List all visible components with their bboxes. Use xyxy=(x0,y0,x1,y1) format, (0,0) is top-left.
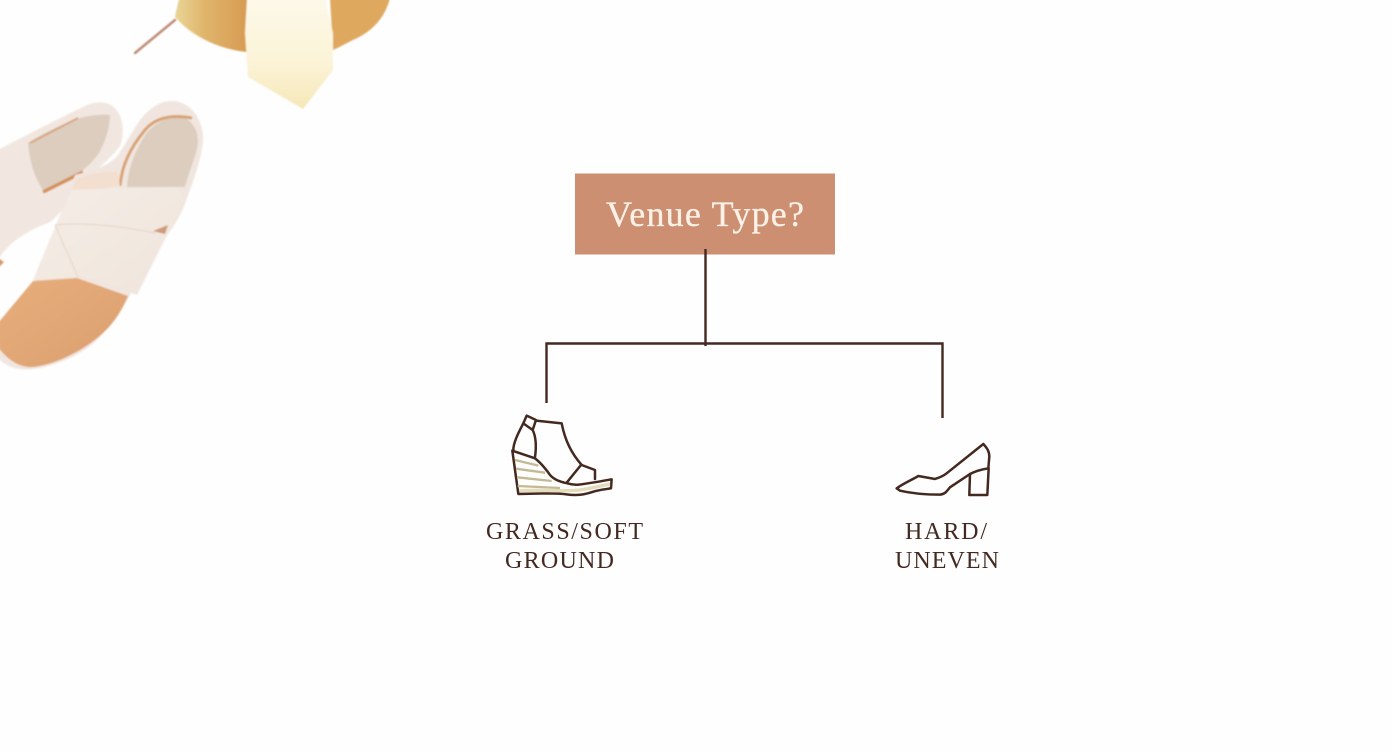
option: grass or soft ground: GROUND xyxy=(505,548,614,574)
heading: Venue Type? xyxy=(606,194,804,234)
photo: pair of sandals xyxy=(0,101,203,370)
option: hard or uneven ground: UNEVEN xyxy=(895,548,999,574)
icon: block heel pump xyxy=(897,444,989,495)
box connector stub xyxy=(704,249,707,254)
connector lines xyxy=(546,249,942,418)
photo: autumn leaf and crystal xyxy=(135,0,390,109)
right sandal xyxy=(0,101,203,370)
decision box: Venue Type? xyxy=(575,174,835,254)
label: HARD/ xyxy=(905,519,987,545)
option: hard or uneven ground xyxy=(895,444,999,574)
option: grass or soft ground xyxy=(486,416,643,574)
label: GRASS/SOFT xyxy=(486,519,643,545)
icon: wedge sandal xyxy=(512,416,612,495)
left sandal xyxy=(0,102,123,268)
